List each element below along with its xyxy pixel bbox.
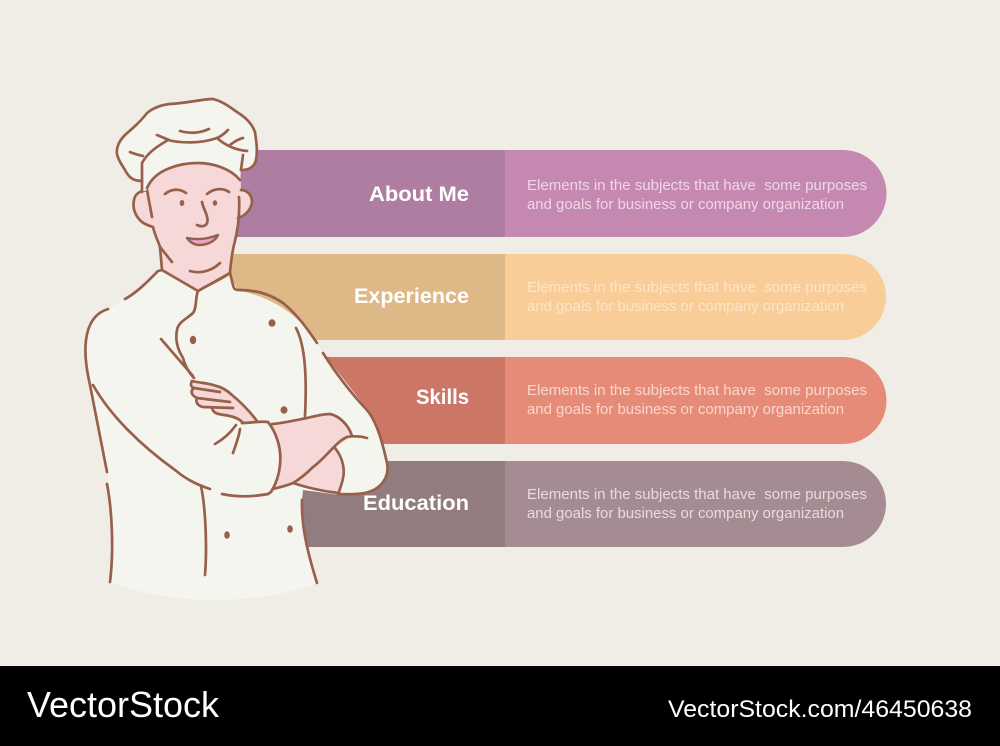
panel: Education row: and goals for business or company organization — [527, 505, 844, 522]
chef head and face — [133, 158, 252, 291]
panel: Skills row — [250, 357, 886, 444]
image url: VectorStock.com/46450638 — [668, 696, 972, 723]
panel: Experience row: Elements in the subjects that have some purposes — [527, 279, 867, 296]
logo wordmark: VectorStock — [27, 684, 220, 725]
panel: Education row: Education — [363, 492, 469, 515]
panel: Skills row: Skills — [416, 386, 469, 409]
panel: Experience row: Experience — [354, 285, 469, 308]
panel: About Me row: and goals for business or company organization — [527, 196, 844, 213]
panel: Education row: Elements in the subjects that have some purposes — [527, 486, 867, 503]
chef jacket — [85, 270, 388, 600]
chef hat — [117, 99, 257, 192]
panel: Experience row: and goals for business or company organization — [527, 298, 844, 315]
illustration: chef with crossed arms — [85, 99, 388, 600]
panel: About Me row: Elements in the subjects that have some purposes — [527, 177, 867, 194]
crossed arms and hands — [191, 381, 367, 494]
panel: About Me row — [200, 150, 886, 237]
panel: Experience row — [200, 254, 886, 340]
panel: Skills row: and goals for business or company organization — [527, 401, 844, 418]
panel: Skills row: Elements in the subjects that have some purposes — [527, 382, 867, 399]
footer band — [0, 666, 1000, 746]
panel: About Me row: About Me — [369, 183, 469, 206]
panel: Education row — [280, 461, 886, 547]
